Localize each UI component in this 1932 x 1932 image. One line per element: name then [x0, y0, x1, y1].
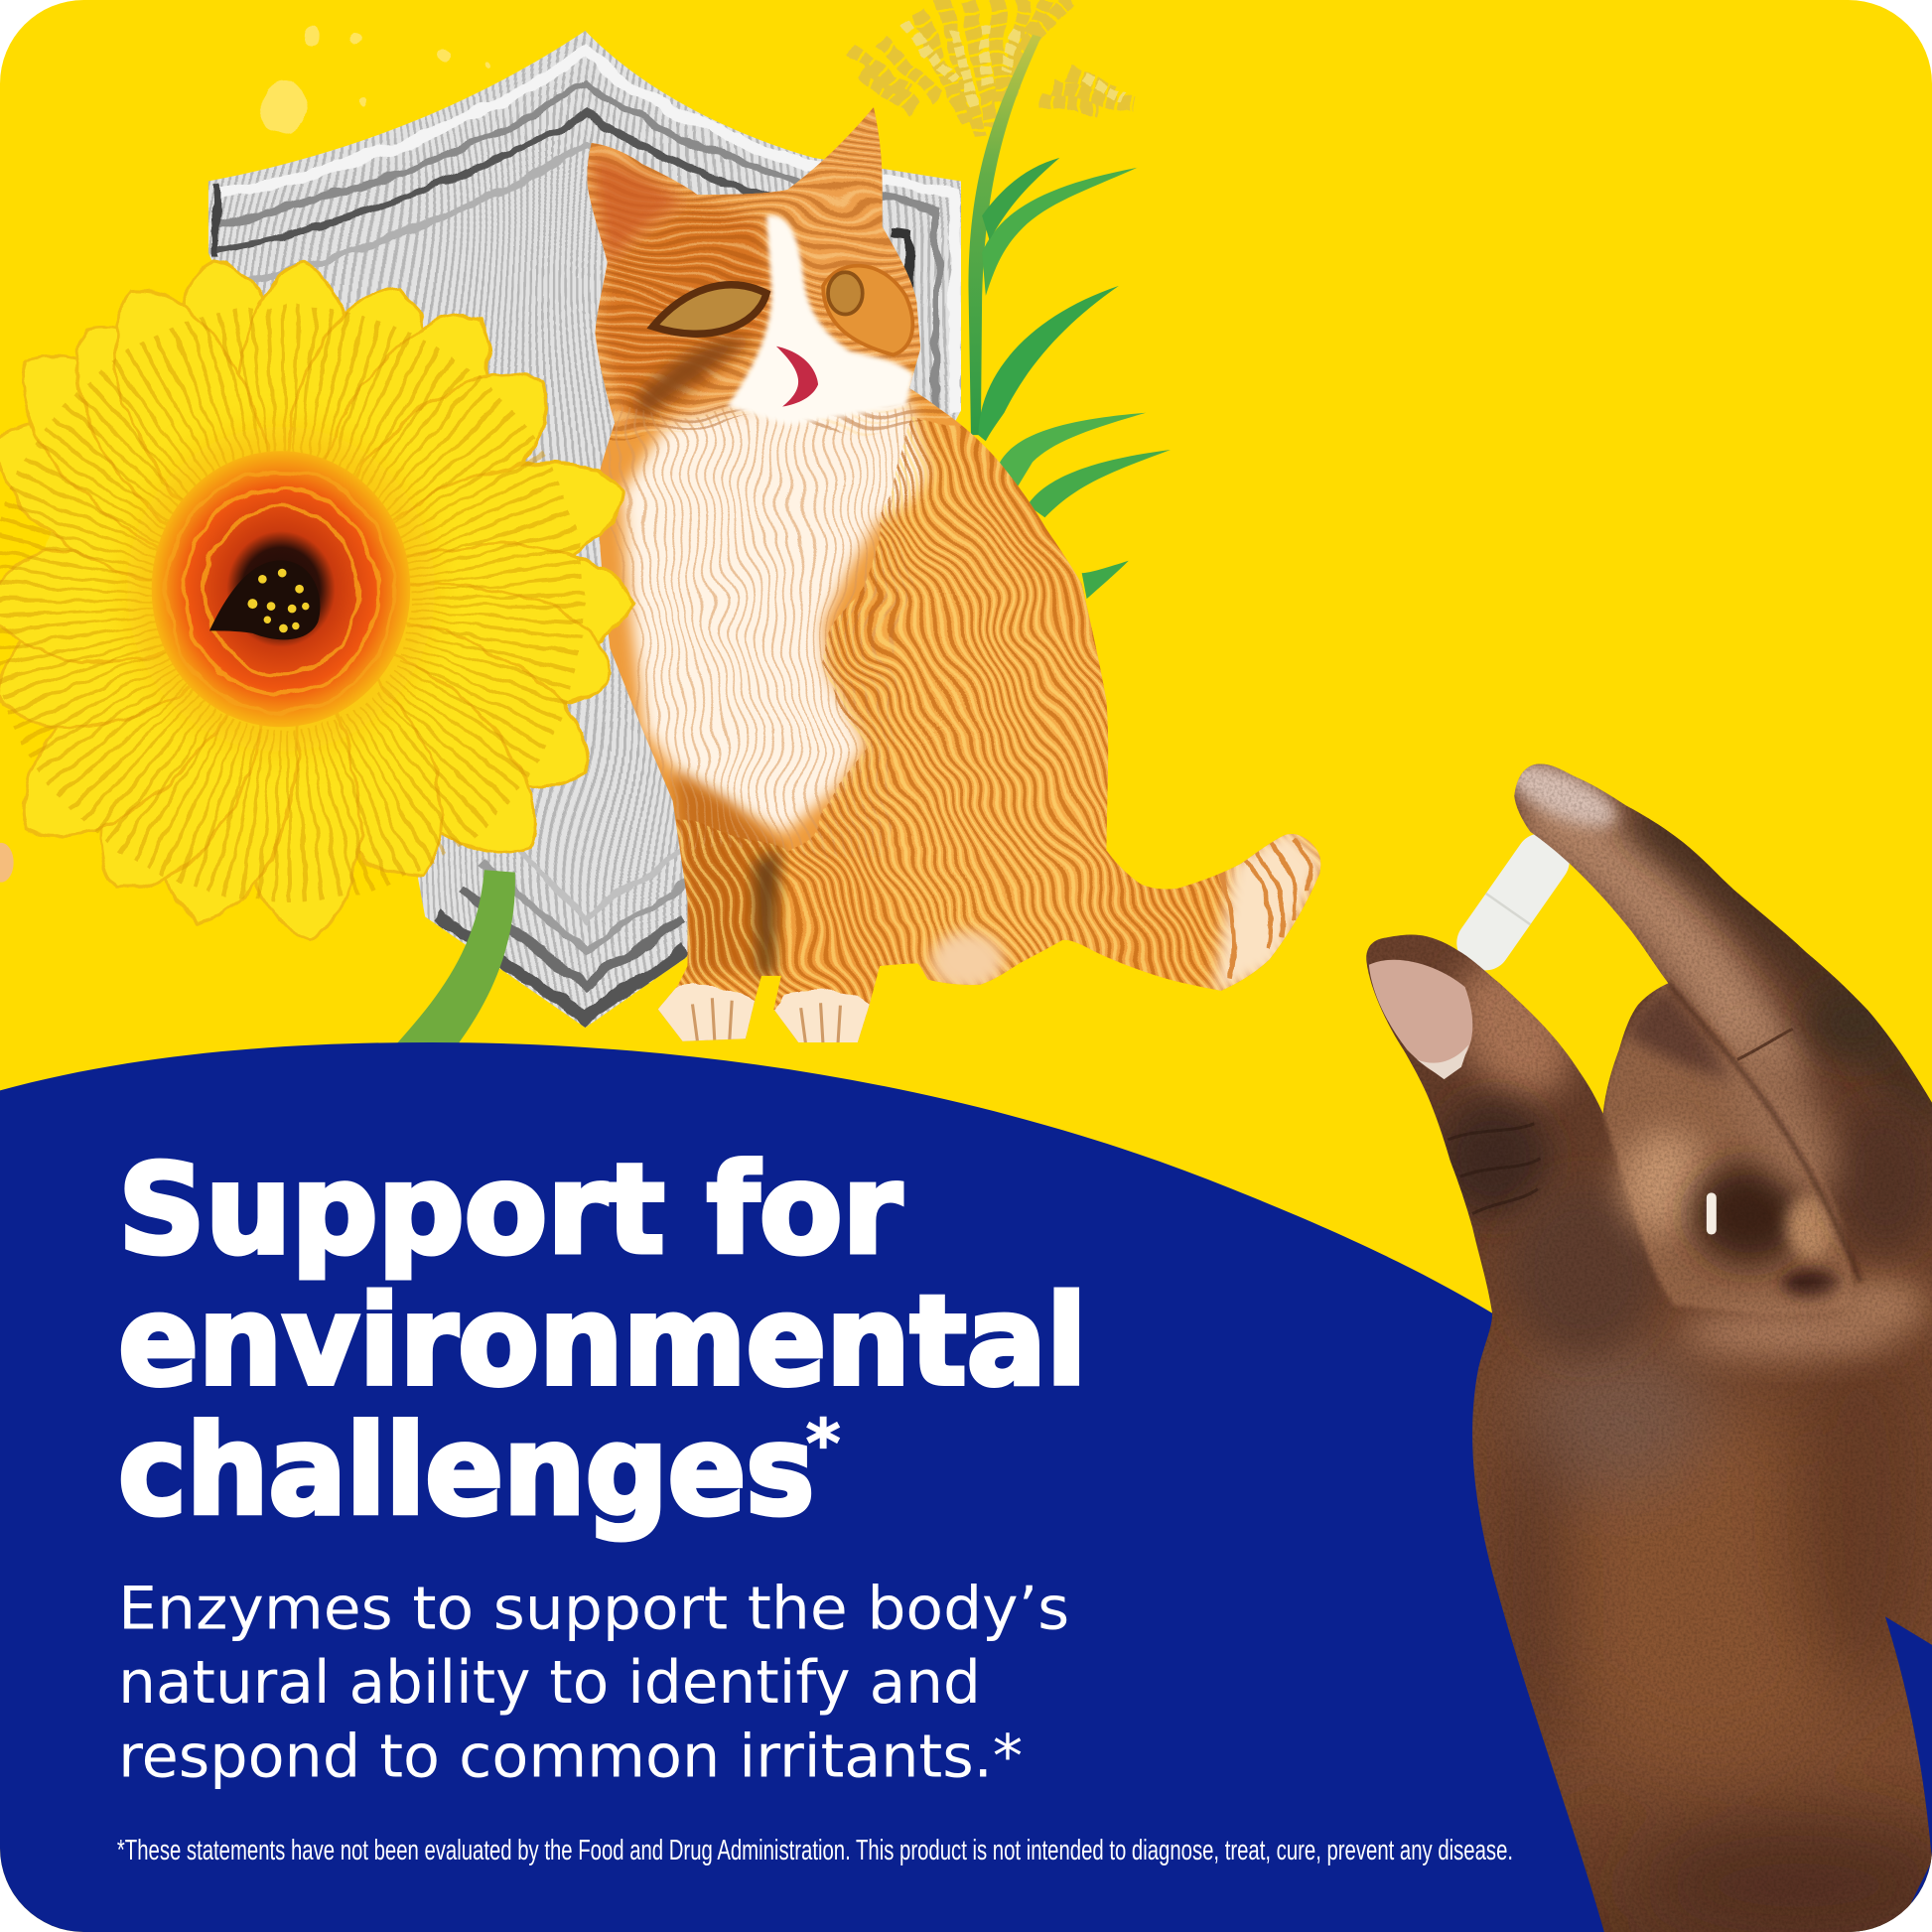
cat hind paw: [930, 931, 1004, 991]
cat dark left face: [599, 200, 771, 426]
curled fingers: [1603, 983, 1852, 1314]
cat hindquarter light fur: [850, 431, 1109, 973]
body copy: [118, 1576, 1069, 1792]
cat fur grain: hindquarters: [653, 419, 1343, 1059]
cat dark left legs: [673, 770, 783, 973]
hand base colour: [1355, 752, 1932, 1932]
shield engraved contour bands: [211, 52, 955, 1018]
body copy: Enzymes to support the body’s: [118, 1576, 1069, 1644]
photo: hand holding capsule: [1355, 750, 1932, 1932]
flower dark centre with seeds: [209, 560, 320, 639]
petal radial grooves: [73, 392, 497, 816]
heading: [118, 1139, 1087, 1543]
flower disc rings: [168, 471, 394, 712]
illustration: goldenrod plant: [850, 0, 1171, 599]
cat leg shadow: [755, 850, 778, 976]
heading: Support for: [118, 1139, 901, 1282]
plant stem and leaves: [968, 35, 1171, 599]
palm dark hollow: [1691, 1162, 1809, 1266]
lit finger base: [1830, 1277, 1928, 1335]
heading: *: [806, 1405, 841, 1482]
cat base fur: [579, 98, 1330, 1053]
index finger dark back: [1639, 813, 1932, 1121]
cat front paws: [653, 985, 875, 1047]
flower orange disc: [152, 451, 410, 727]
petal base glow: [127, 426, 435, 752]
cat fur grain: chest: [610, 407, 918, 850]
heading: challenges: [118, 1400, 814, 1543]
curled finger highlight: [1621, 1131, 1711, 1235]
knuckle shadow: [1808, 986, 1901, 1059]
back of hand tone: [1509, 1182, 1657, 1355]
cat head base: [579, 98, 924, 431]
heading: environmental: [118, 1271, 1087, 1414]
cat left ear inner: [592, 154, 685, 265]
pale pollen specks: [261, 27, 490, 132]
cat right eye: [828, 272, 863, 314]
capsule: [1448, 824, 1580, 980]
fingertip highlight: [1499, 750, 1625, 840]
curled finger shadow top: [1626, 988, 1737, 1084]
skin grain overlay: [1355, 752, 1932, 1932]
cat fur grain: head: [588, 107, 952, 441]
joint crease line: [1737, 1029, 1793, 1059]
thumb highlight: [1432, 939, 1594, 1119]
lit heel of palm: [1682, 1309, 1891, 1358]
blue wave panel: [0, 1042, 1932, 1932]
cat white blaze and muzzle: [727, 215, 914, 425]
index crease lit: [1704, 1020, 1857, 1210]
flower petals: [0, 247, 641, 942]
peach fragment at left edge: [0, 843, 14, 883]
cat nose and mouth: [776, 346, 818, 407]
body copy: natural ability to identify and: [118, 1649, 981, 1718]
shield base: [198, 25, 973, 1035]
illustration: sunflower: [0, 247, 641, 1043]
cat tail stripes: [1220, 838, 1311, 980]
body copy: respond to common irritants.*: [118, 1724, 1023, 1792]
cat left eye: [653, 285, 766, 334]
blue strip right of wrist: [1885, 1616, 1932, 1861]
illustration: silver shield: [208, 31, 961, 1028]
wrist tone: [1497, 1318, 1932, 1932]
cat right eye patch: [823, 266, 912, 354]
palm reflection: [1707, 1192, 1717, 1235]
thumb knuckle creases: [1448, 1124, 1540, 1213]
hand body and shading: [1355, 750, 1932, 1932]
index finger lit underside: [1528, 801, 1774, 1084]
cat tail tip: [1213, 828, 1324, 996]
cat face shadow: [635, 339, 752, 419]
shield brushed grain: [208, 31, 961, 1027]
goldenrod blossoms: [850, 0, 1134, 136]
paw toe lines: [692, 998, 840, 1044]
palm fold shadow: [1782, 1269, 1841, 1299]
flower stem: [397, 870, 515, 1043]
index finger side dark: [1834, 1103, 1932, 1251]
thumb nail: [1369, 960, 1472, 1077]
finger separation crease: [1668, 983, 1861, 1282]
illustration: orange cat: [588, 107, 1320, 1042]
cat white chest: [622, 399, 929, 834]
nail lunula: [1417, 1044, 1468, 1079]
palm lit folds: [1787, 1194, 1836, 1258]
thumb knuckle shadow: [1437, 1099, 1550, 1217]
